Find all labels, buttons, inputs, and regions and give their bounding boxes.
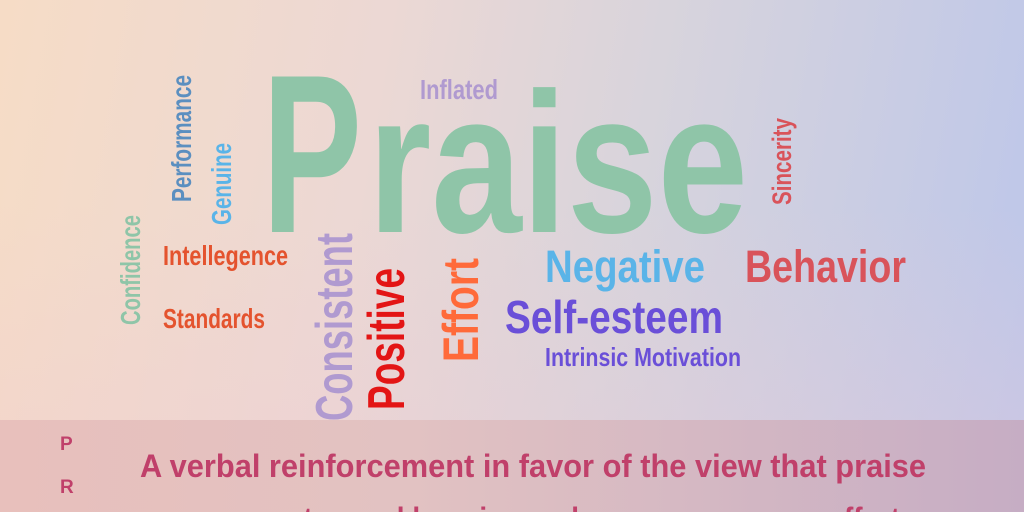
definition text (140, 448, 926, 512)
word: Praise: raise (368, 52, 748, 275)
word: Negative: Negative (545, 241, 705, 292)
word: Sincerity: Sincerity (767, 118, 797, 205)
word: Self-esteem: Self-esteem (505, 291, 723, 343)
word: Genuine: Genuine (206, 143, 237, 225)
word: Intellegence: Intellegence (163, 240, 288, 271)
word: Performance: Performance (166, 75, 197, 202)
word: Standards: Standards (163, 303, 265, 334)
word: Inflated: Inflated (420, 74, 498, 105)
side letters P R: P (60, 434, 73, 455)
side letters P R: R (60, 477, 74, 498)
word: Behavior: Behavior (745, 241, 906, 292)
word: Praise: P (262, 27, 362, 280)
word: Confidence: Confidence (115, 215, 146, 325)
word cloud (115, 27, 906, 421)
word: Intrinsic Motivation: Intrinsic Motivation (545, 342, 741, 372)
bottom band: definition (0, 420, 1024, 512)
definition text: A verbal reinforcement in favor of the view that praise (140, 448, 926, 484)
word: Consistent: Consistent (306, 233, 364, 421)
word: Praise (262, 27, 748, 280)
word: Positive: Positive (358, 268, 416, 410)
side letters P R (60, 434, 74, 498)
word: Effort: Effort (433, 258, 489, 362)
